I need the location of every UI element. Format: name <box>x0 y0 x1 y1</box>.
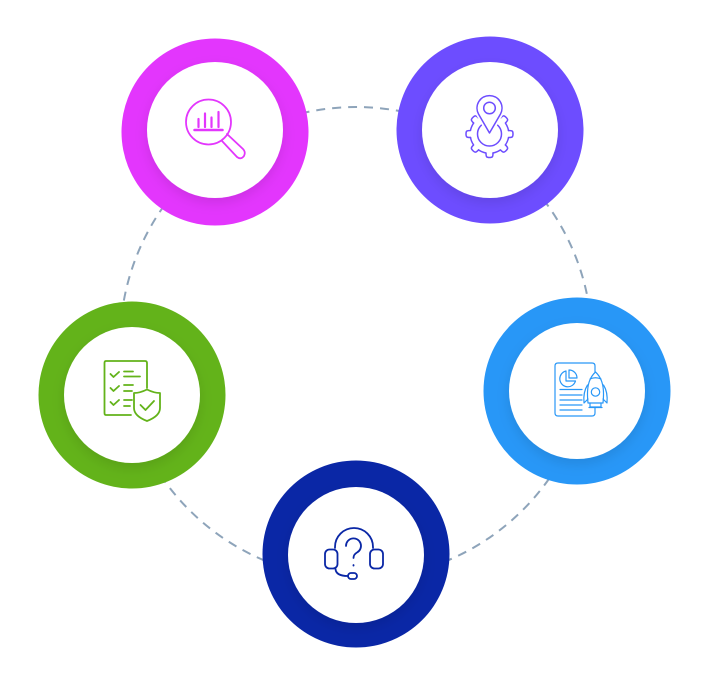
icon: checklist with shield <box>104 361 160 421</box>
navy ring <box>262 460 450 648</box>
icon: document with rocket <box>555 363 607 416</box>
node: location and settings (violet) <box>396 36 584 224</box>
white disc <box>64 327 200 463</box>
node: analytics (magenta) <box>122 38 308 226</box>
violet ring <box>396 36 584 224</box>
blue ring <box>484 298 670 484</box>
icon: headset with question mark <box>325 528 383 579</box>
node: compliance checklist (green) <box>38 302 226 488</box>
node: report and launch (blue) <box>484 298 670 484</box>
node: customer support (navy) <box>262 460 450 648</box>
icon: magnifying glass with bar chart <box>186 100 245 158</box>
dashed connecting ring <box>120 107 592 579</box>
white disc <box>509 323 645 459</box>
white disc <box>288 487 424 623</box>
gear teeth <box>465 110 514 158</box>
green ring <box>38 302 226 488</box>
magenta ring <box>122 38 308 226</box>
white disc <box>422 62 558 198</box>
white disc <box>147 62 283 198</box>
icon: map pin on gear <box>465 96 514 158</box>
